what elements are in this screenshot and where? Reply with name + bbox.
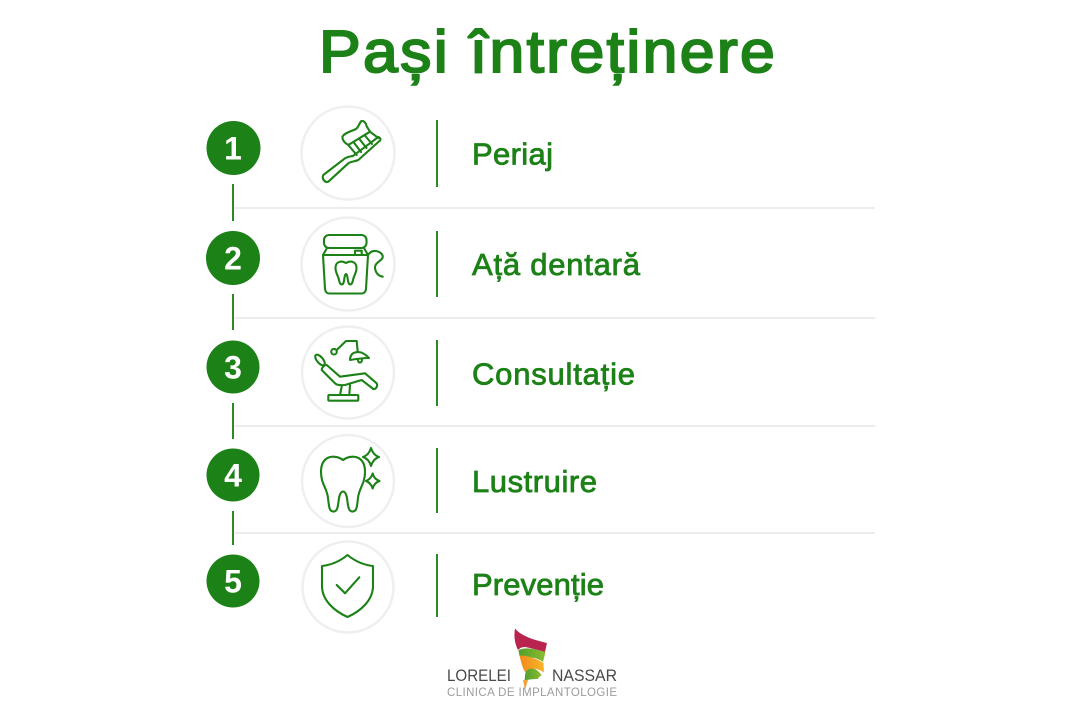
step 5: Prevenție — [206, 542, 604, 632]
number badge 2: 2 — [224, 240, 242, 276]
number badge 3: 3 — [224, 350, 242, 386]
logo: Lorelei Nassar — [447, 628, 617, 699]
label: Ață dentară: Ață dentară — [472, 247, 641, 282]
logo ribbon — [514, 628, 547, 690]
label: Periaj: Periaj — [472, 136, 553, 172]
number badge 1: 1 — [224, 130, 242, 166]
logo name right: NASSAR — [552, 666, 617, 685]
number badge 5: 5 — [224, 564, 242, 600]
step 1: Periaj — [206, 106, 553, 200]
label: Lustruire: Lustruire — [472, 464, 597, 499]
number badge 5 — [206, 554, 260, 608]
step 3: Consultație — [206, 326, 635, 418]
title: Pași întreținere — [319, 19, 775, 85]
icon: dental floss box — [302, 218, 394, 310]
icon: shield with check — [302, 542, 394, 632]
icon: toothbrush — [302, 106, 394, 200]
icon: dental chair — [302, 326, 394, 418]
logo name: LORELEI — [447, 666, 511, 685]
number badge 1 — [206, 121, 260, 175]
label: Prevenție: Prevenție — [472, 567, 604, 602]
label: Consultație: Consultație — [472, 356, 635, 392]
number badge 4 — [206, 448, 260, 502]
number badge 3 — [206, 340, 260, 394]
number badge 2 — [206, 231, 260, 285]
number badge 4: 4 — [224, 458, 242, 494]
logo tagline: CLINICA DE IMPLANTOLOGIE — [447, 687, 617, 699]
step 4: Lustruire — [206, 435, 597, 527]
step 2: Ață dentară — [206, 218, 641, 310]
icon: shining tooth — [302, 435, 394, 527]
